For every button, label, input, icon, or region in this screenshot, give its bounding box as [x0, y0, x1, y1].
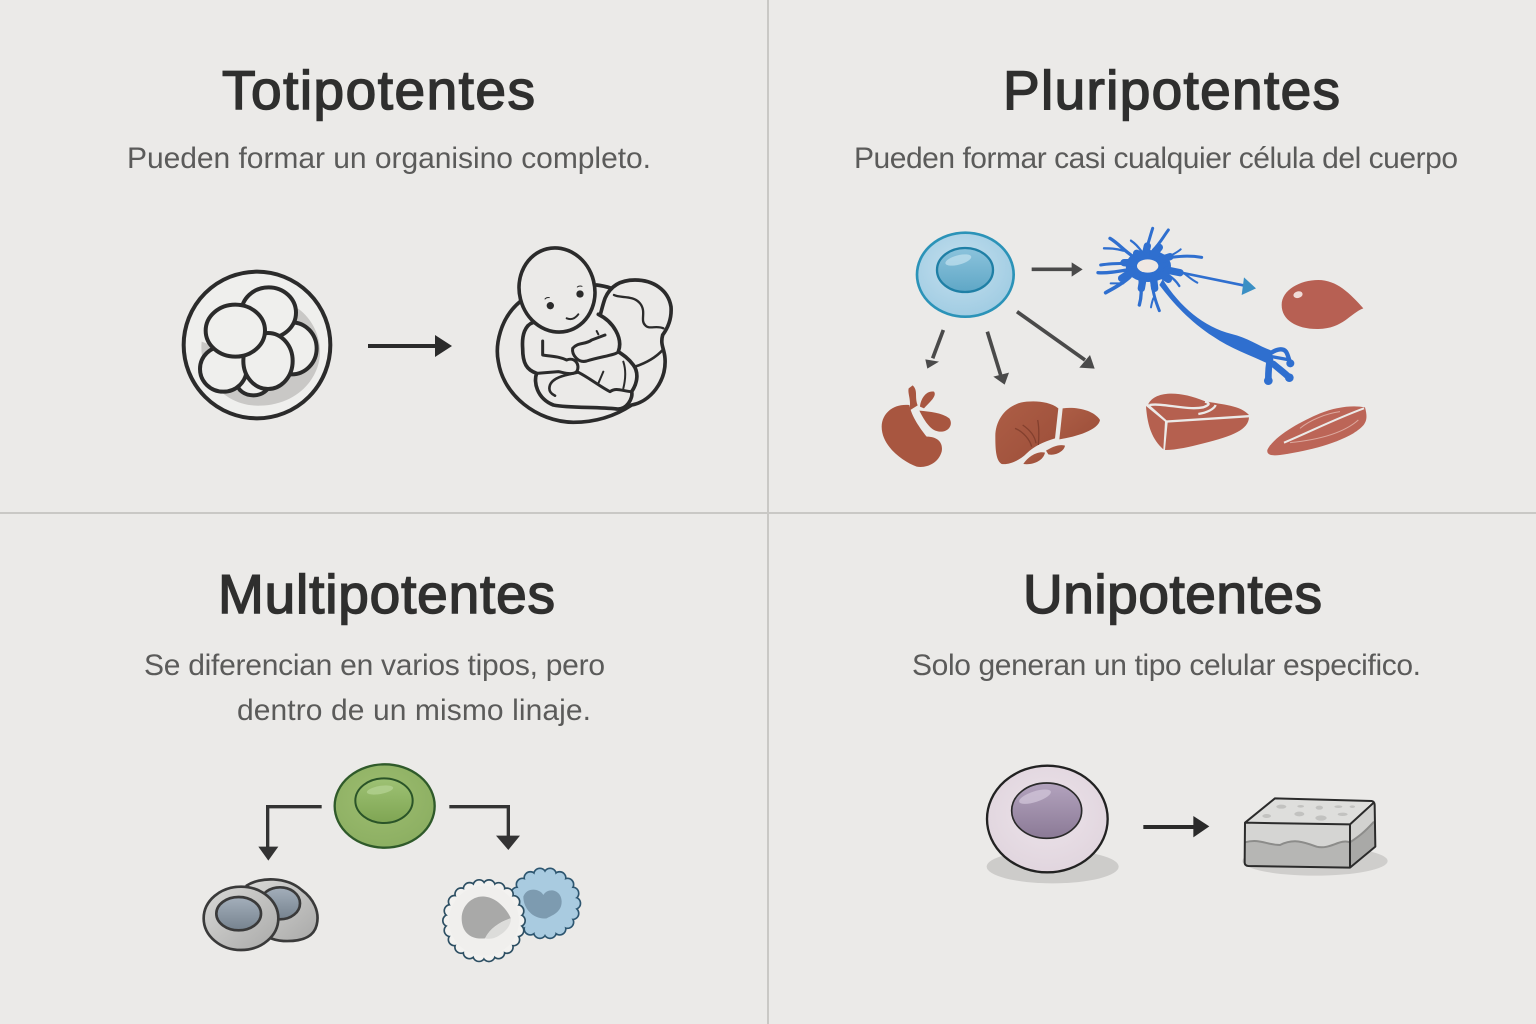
panel: totipotentes — [127, 59, 671, 422]
arrow: to gray cells — [258, 807, 322, 861]
arrow: to immune cells — [449, 807, 520, 850]
icon: blue stem cell — [917, 233, 1014, 317]
icon: blue immune cell — [516, 874, 574, 933]
icon: red cell drop — [1282, 280, 1363, 329]
heading: Totipotentes: Totipotentes — [222, 59, 535, 121]
arrow: morula to baby — [368, 335, 452, 357]
panel: multipotentes — [144, 563, 605, 956]
icon: baby with placenta — [497, 240, 671, 422]
panel: pluripotentes — [854, 59, 1458, 467]
description: unipotentes: Solo generan un tipo celular especifico. — [912, 649, 1421, 682]
description: multipotentes: dentro de un mismo linaje. — [237, 694, 591, 727]
description: multipotentes — [144, 649, 605, 727]
description: pluripotentes: Pueden formar casi cualquier célula del cuerpo — [854, 142, 1458, 175]
icon: purple cell — [987, 766, 1119, 883]
icon: white immune cell — [449, 886, 519, 956]
heading: Pluripotentes: Pluripotentes — [1003, 59, 1340, 121]
description: totipotentes: Pueden formar un organisino completo. — [127, 142, 651, 175]
icon: heart — [882, 385, 951, 467]
icon: tissue block — [1242, 798, 1388, 876]
icon: green stem cell — [335, 764, 435, 848]
icon: muscle tissue block — [1146, 394, 1249, 450]
icon: liver — [995, 401, 1100, 464]
icon: morula cell cluster — [184, 272, 330, 418]
description: multipotentes: Se diferencian en varios tipos, pero — [144, 649, 605, 682]
icon: elongated muscle — [1267, 406, 1366, 455]
icon: gray cells — [204, 879, 318, 950]
panel: unipotentes — [912, 563, 1421, 883]
heading: Multipotentes: Multipotentes — [218, 563, 555, 625]
arrow: cell to tissue — [1143, 816, 1209, 837]
icon: neuron — [1098, 228, 1294, 385]
arrows: stem cell to targets — [925, 262, 1095, 385]
heading: Unipotentes: Unipotentes — [1023, 563, 1322, 625]
